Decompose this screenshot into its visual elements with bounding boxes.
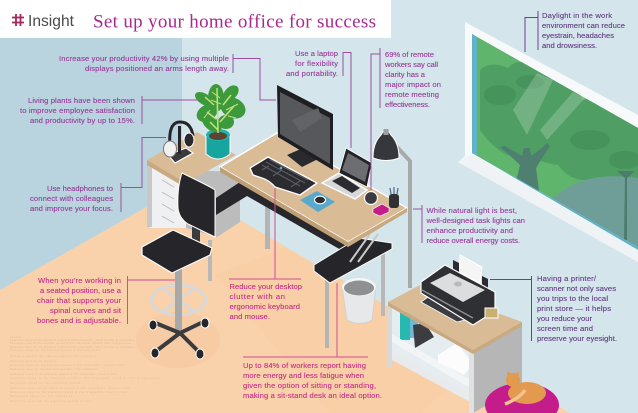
callout: chair: a seated position, use a bbox=[40, 286, 122, 295]
callout: printer: screen time and bbox=[537, 324, 593, 333]
callout: sit-stand desk: making a sit-stand desk an ideal option. bbox=[243, 391, 382, 400]
callout: headphones: connect with colleagues bbox=[30, 194, 113, 203]
callout: living plants: and productivity by up to 15%. bbox=[30, 116, 135, 125]
callout: task lights: enhance productivity and bbox=[426, 226, 513, 235]
callout: laptop: and portability. bbox=[286, 69, 338, 78]
main desk bbox=[220, 133, 407, 247]
callout: daylight: and drowsiness. bbox=[542, 41, 597, 50]
callout: headphones: and improve your focus. bbox=[30, 204, 113, 213]
header band bbox=[0, 0, 391, 38]
callout: chair: chair that supports your bbox=[37, 296, 121, 305]
footnotes: Reference notes for the statistics bbox=[10, 360, 57, 363]
footnotes: Reference notes for the statistics quoted in this infographic, listed in order bbox=[10, 391, 127, 394]
footnotes: Reference notes for the statistics quoted in this infographic, listed in order of appearance bbox=[10, 339, 136, 342]
footnotes: Sources: bbox=[10, 336, 21, 339]
callout: laptop bbox=[286, 49, 351, 148]
footnotes: Reference notes for the statistics quoted in this infographic, listed in order bbox=[10, 373, 118, 376]
pink box bbox=[373, 204, 389, 216]
footnotes: Reference notes for the statistics quoted in this infographic, listed in order of appearance bbox=[10, 377, 161, 380]
footnotes: Reference notes for the statistics bbox=[10, 395, 73, 398]
callout: chair: When you're working in bbox=[38, 276, 121, 285]
callout: printer: you reduce your bbox=[537, 314, 592, 323]
footnotes: Reference notes for the statistics quoted in this infographic, listed in order of appearance bbox=[10, 342, 132, 345]
footnotes: Reference notes for the statistics quoted in this bbox=[10, 400, 91, 403]
callout: call clarity: 69% of remote bbox=[385, 50, 434, 59]
callout: printer: Having a printer/ bbox=[537, 274, 597, 283]
callout: keyboard and mouse: and mouse. bbox=[230, 312, 270, 321]
callout: living plants: Living plants have been shown bbox=[28, 96, 135, 105]
callout: chair bbox=[37, 276, 175, 325]
mouse pad and mouse bbox=[300, 191, 335, 212]
callout: sit-stand desk bbox=[243, 283, 382, 400]
callout: chair: spinal curves and sit bbox=[50, 306, 122, 315]
title: Set up your home office for success bbox=[93, 12, 376, 32]
wastebasket bbox=[342, 278, 376, 324]
callout: laptop: Use a laptop bbox=[295, 49, 338, 58]
potted plant bbox=[193, 82, 249, 159]
callout: printer: print store — it helps bbox=[537, 304, 611, 313]
callout: call clarity: workers say call bbox=[384, 60, 438, 69]
callout: task lights: reduce overall energy costs. bbox=[426, 236, 520, 245]
callout: living plants bbox=[20, 96, 199, 125]
footnotes: Reference notes for the statistics quoted in this infographic, listed in order of appearance bbox=[10, 346, 136, 349]
footnotes bbox=[10, 336, 161, 403]
callout: task lights: well-designed task lights can bbox=[426, 216, 525, 225]
callout: laptop: for flexibility bbox=[295, 59, 338, 68]
cat on cushion bbox=[485, 371, 559, 413]
window bbox=[458, 22, 638, 262]
speaker bbox=[364, 192, 378, 204]
pen cup bbox=[389, 187, 399, 208]
logo: Insight bbox=[28, 13, 75, 30]
callout: call clarity: clarity has a bbox=[385, 70, 426, 79]
callout: chair: bones and is adjustable. bbox=[37, 316, 121, 325]
office chair bbox=[136, 173, 220, 368]
callout: daylight: eyestrain, headaches bbox=[542, 31, 614, 40]
footnotes: Reference notes for the statistics quoted in this infographic bbox=[10, 349, 101, 352]
callout: keyboard and mouse: Reduce your desktop bbox=[230, 282, 302, 291]
callout: headphones: Use headphones to bbox=[47, 184, 113, 193]
footnotes: Reference notes for the statistics quoted in this infographic bbox=[10, 355, 97, 358]
printer table with shelves bbox=[388, 285, 522, 413]
callout: multiple displays bbox=[59, 54, 276, 100]
callout: sit-stand desk: Up to 84% of workers report having bbox=[243, 361, 366, 370]
callout: daylight bbox=[525, 11, 625, 52]
footnotes: Reference notes for the statistics quoted in this infographic, listed in order bbox=[10, 364, 124, 367]
callout: daylight: Daylight in the work bbox=[542, 11, 612, 20]
keyboard bbox=[250, 157, 317, 195]
callout: call clarity: major impact on bbox=[385, 80, 441, 89]
callout: call clarity: remote meeting bbox=[385, 90, 439, 99]
sit-stand desk base and legs bbox=[208, 175, 392, 348]
printer bbox=[421, 255, 498, 325]
callout: multiple displays: Increase your productivity 42% by using multiple bbox=[59, 54, 229, 63]
callout: call clarity: effectiveness. bbox=[385, 100, 430, 109]
callout: keyboard and mouse: clutter with an bbox=[230, 292, 285, 301]
footnotes: Reference notes for the statistics quoted bbox=[10, 382, 81, 385]
callout: printer: scanner not only saves bbox=[537, 284, 616, 293]
footnotes: Reference notes for the statistics quoted in this infographic, listed in order bbox=[10, 387, 130, 390]
callout: daylight: environment can reduce bbox=[542, 21, 625, 30]
headphones on stand bbox=[164, 122, 194, 163]
callout: task lights bbox=[413, 205, 525, 245]
callout: sit-stand desk: more energy and less fatigue when bbox=[243, 371, 364, 380]
callout: task lights: While natural light is best, bbox=[426, 206, 517, 215]
side desk with drawers bbox=[147, 132, 240, 237]
callout: sit-stand desk: given the option of sitting or standing, bbox=[243, 381, 376, 390]
callout: headphones bbox=[30, 138, 166, 213]
callout: living plants: to improve employee satisfaction bbox=[20, 106, 135, 115]
callout: multiple displays: displays positioned an arms length away. bbox=[85, 64, 229, 73]
callout: keyboard and mouse bbox=[229, 188, 302, 321]
callout: keyboard and mouse: ergonomic keyboard bbox=[230, 302, 300, 311]
callout: printer bbox=[490, 274, 617, 343]
monitor bbox=[277, 85, 333, 170]
lamp bbox=[373, 129, 410, 288]
callout: printer: you trips to the local bbox=[537, 294, 608, 303]
callout: printer: preserve your eyesight. bbox=[537, 334, 617, 343]
laptop bbox=[322, 148, 372, 199]
callout: call clarity bbox=[371, 48, 441, 190]
footnotes: Reference notes for the statistics quoted in this infographic bbox=[10, 368, 99, 371]
